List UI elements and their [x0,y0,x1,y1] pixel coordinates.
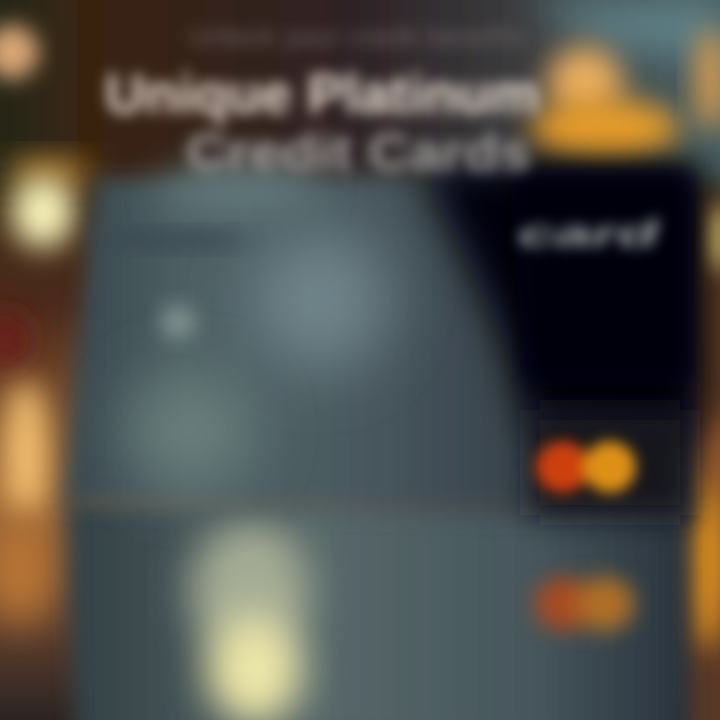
title: Unique Platinum [105,62,540,125]
card logo [536,441,636,493]
reflected card logo [535,577,634,631]
title [105,62,540,182]
reflection of card [65,500,690,720]
subtitle: Unlock your credit benefits [188,21,528,52]
credit card [62,165,700,520]
title: Credit Cards [186,124,531,182]
card brand wordmark: card [518,213,660,254]
